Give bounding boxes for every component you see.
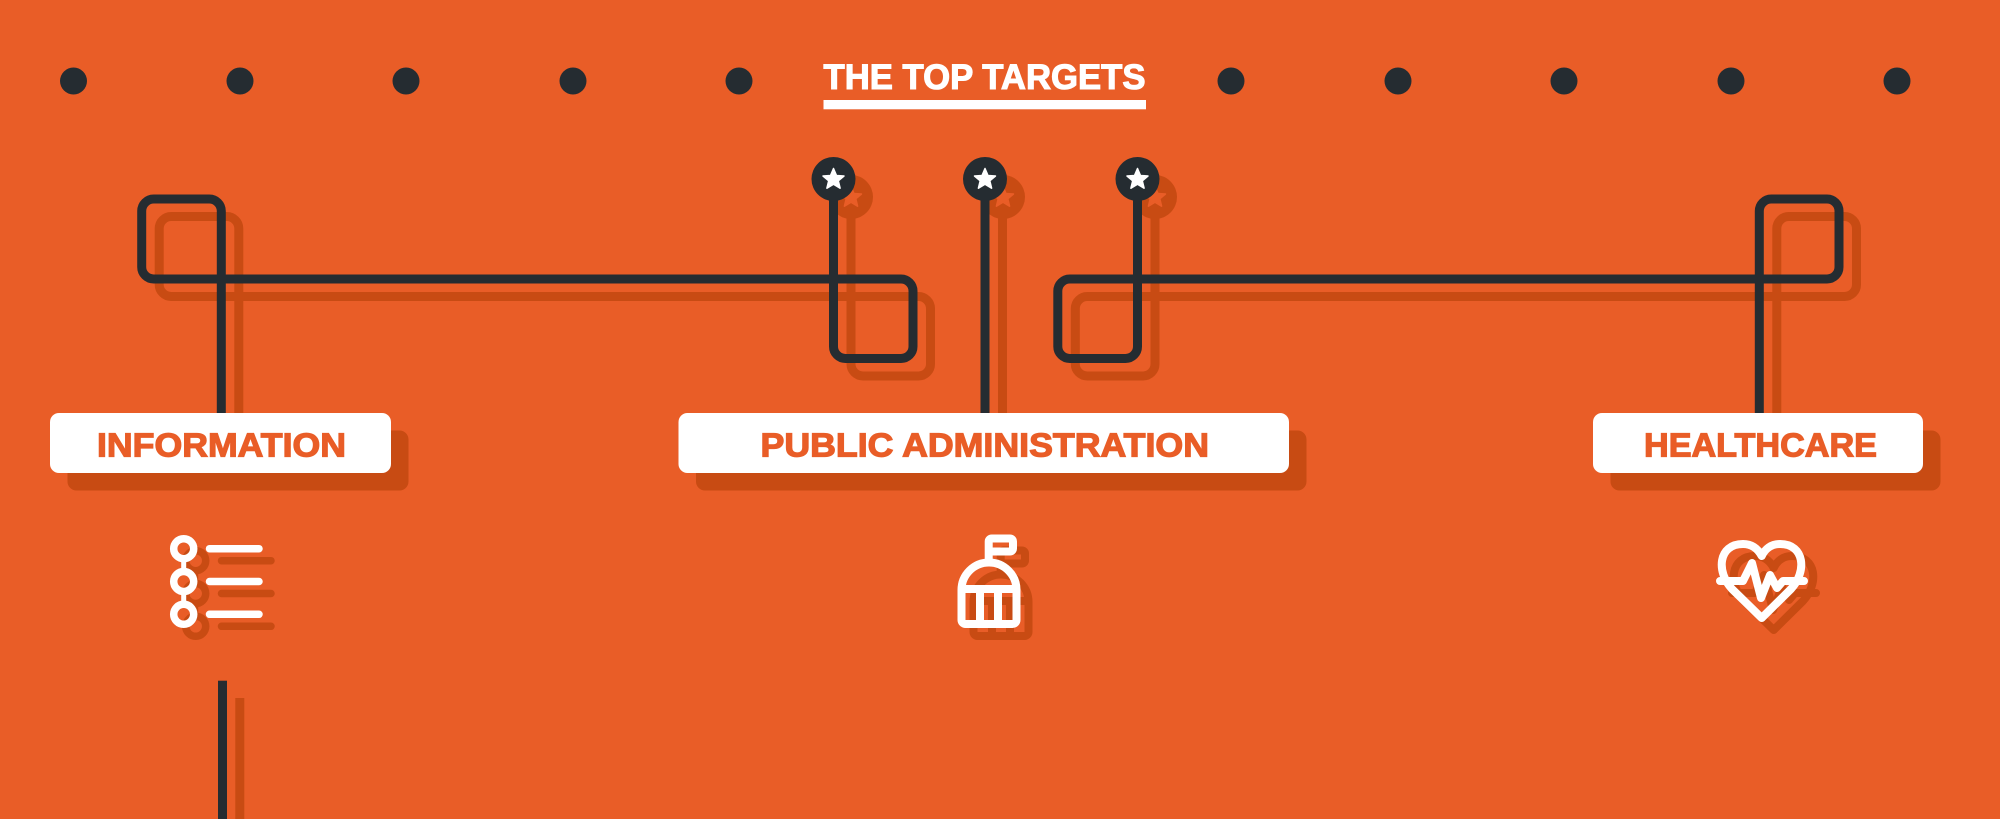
title: THE TOP TARGETS (824, 58, 1146, 97)
icon: government dome (962, 538, 1028, 636)
pin: star centre (963, 157, 1025, 219)
label: information (50, 413, 408, 490)
connector: healthcare (1058, 196, 1856, 430)
icon: heart with pulse (1720, 544, 1816, 630)
label: public administration: PUBLIC ADMINISTRATION (760, 426, 1209, 464)
pin: star right (1116, 157, 1177, 219)
label: healthcare (1593, 413, 1940, 490)
label: healthcare: HEALTHCARE (1644, 426, 1877, 464)
icon: list with linked nodes (174, 539, 271, 636)
connector: information (142, 196, 930, 430)
pin: star left (812, 157, 873, 219)
stem below information icon (218, 681, 244, 819)
label: information: INFORMATION (97, 426, 346, 464)
decorative dot row (60, 68, 1910, 94)
connector: public administration (985, 195, 1002, 413)
label: public administration (678, 413, 1306, 490)
